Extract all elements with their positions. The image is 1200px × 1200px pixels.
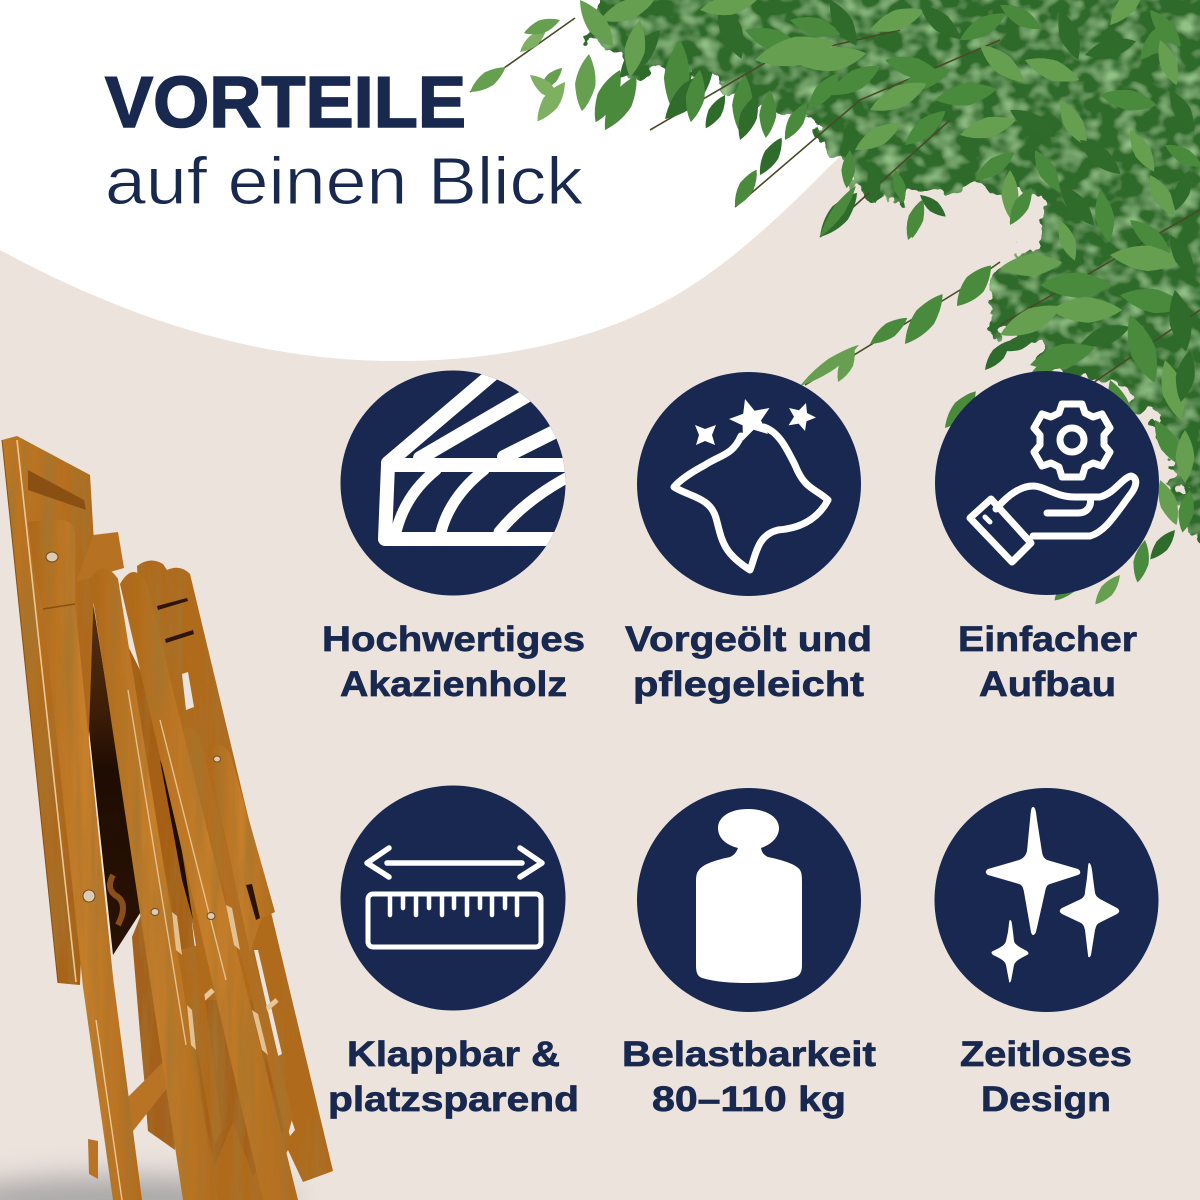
slat slits [157,598,194,643]
table top panel [2,436,95,985]
circle [637,788,861,1012]
benefit: pre-oiled [625,372,872,704]
circle [934,788,1158,1012]
short legs [183,727,293,1138]
label: Einfacher [958,620,1137,659]
icon: wood plank [385,372,580,539]
icon: weight [696,809,802,983]
twigs [470,18,1200,385]
middle strut between second and third legs [125,640,222,1145]
white curved header shape [0,0,960,361]
label: Aufbau [979,665,1116,704]
label: Zeitloses [960,1035,1132,1074]
label: Belastbarkeit [622,1035,876,1074]
circle [340,786,566,1010]
label: Akazienholz [340,665,567,704]
benefit: hardwood [322,370,585,704]
icon: ruler with arrow [367,848,542,947]
label: Klappbar & [347,1035,560,1074]
label [322,620,585,704]
edge highlight [17,440,76,982]
rear stretcher stub [76,532,124,582]
dense leaf mass [585,0,1200,580]
icon: hand holding gear [970,404,1136,562]
contact shadow [0,1176,295,1200]
heading: VORTEILE: VORTEILE [105,63,466,143]
icon: sparkles [986,807,1119,982]
title [105,63,584,219]
subheading: auf einen Blick [105,144,584,219]
leaves: main canopy [788,0,1200,609]
circle [637,372,861,596]
label [328,1035,579,1119]
dowel rods [200,990,277,1012]
hanger hook [110,875,123,925]
see-through gaps [136,666,295,1136]
label: 80–110 kg [652,1080,846,1119]
foot rail [88,1139,98,1179]
label: platzsparend [328,1080,579,1119]
label: Vorgeölt und [625,620,872,659]
third leg [120,572,298,1200]
front leg [28,520,142,1200]
leaves: upper left spray [466,0,950,244]
circle [935,371,1159,595]
cross brace [128,1062,168,1131]
benefit: load capacity [622,788,876,1119]
back slatted frame [136,560,333,1200]
benefit: easy assembly [935,371,1159,704]
folded acacia bistro set [0,436,333,1200]
label: Hochwertiges [322,620,585,659]
label [625,620,872,704]
label [958,620,1137,704]
bolts [46,552,58,562]
beige gap between front leg and brace [114,943,146,1108]
icon: cloth with stars [674,399,828,570]
label [960,1035,1132,1119]
benefit: timeless design [934,788,1158,1119]
leaves: lower hanging branch [797,182,1066,433]
lower rear chevrons [190,1000,285,1176]
benefit: foldable [328,786,579,1119]
label: pflegeleicht [633,665,864,704]
second leg [90,568,217,1200]
label [622,1035,876,1119]
middle brace leg [132,905,175,1150]
foliage: acacia branches [466,0,1200,609]
label: Design [981,1080,1111,1119]
dark tabletop underside [75,584,142,955]
circle [340,370,566,596]
